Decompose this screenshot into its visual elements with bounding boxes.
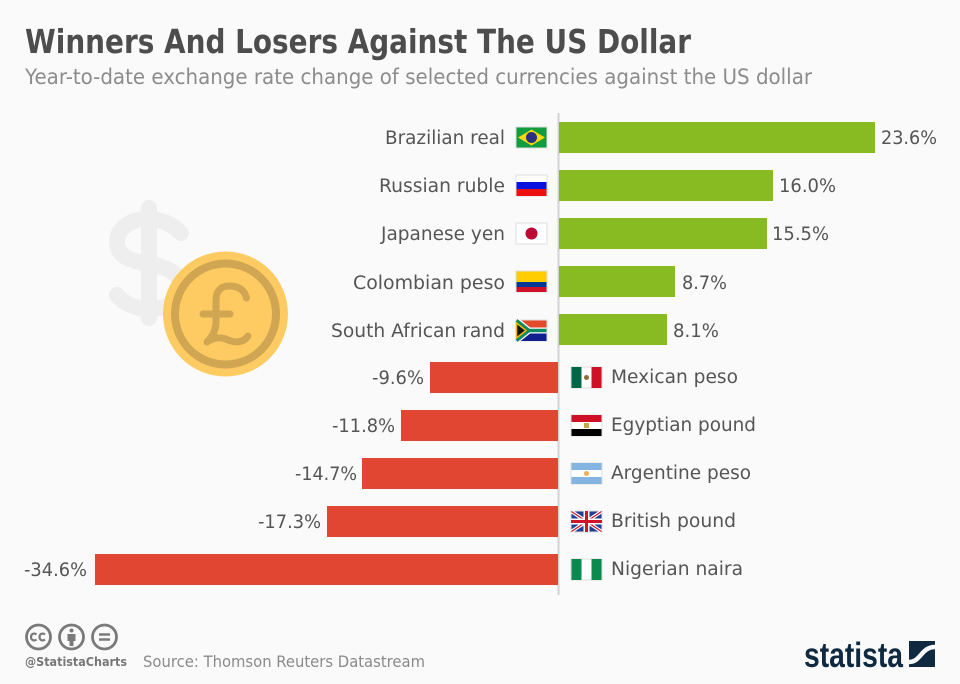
icon: pound coin bbox=[163, 252, 288, 376]
source: Source: Thomson Reuters Datastream bbox=[143, 652, 425, 671]
handle: @StatistaCharts bbox=[25, 655, 127, 669]
row: Nigerian naira: Nigerian naira bbox=[611, 559, 743, 580]
row: Russian ruble: 16.0% bbox=[779, 176, 836, 197]
icon: dollar and pound coin bbox=[117, 208, 288, 376]
row: Argentine peso: Argentine peso bbox=[611, 463, 751, 484]
row: Japanese yen: Japanese yen bbox=[380, 224, 505, 245]
row: Mexican peso: Mexican peso bbox=[611, 367, 738, 388]
row: South African rand: South African rand bbox=[331, 321, 505, 342]
row: Russian ruble bbox=[379, 170, 836, 201]
row: Colombian peso: Colombian peso bbox=[353, 273, 505, 294]
row: South African rand bbox=[331, 314, 719, 345]
icon: statista mark bbox=[909, 641, 935, 667]
row: South African rand: 8.1% bbox=[673, 321, 719, 342]
row: British pound bbox=[258, 506, 736, 537]
row: Argentine peso bbox=[295, 458, 751, 489]
row: Egyptian pound: Egyptian pound bbox=[611, 415, 756, 436]
row: Nigerian naira bbox=[24, 554, 743, 585]
row: Russian ruble: Russian ruble bbox=[379, 176, 505, 197]
row: Mexican peso bbox=[372, 362, 738, 393]
row: Brazilian real bbox=[385, 122, 937, 153]
icon: no derivatives bbox=[92, 625, 116, 649]
row: Mexican peso: -9.6% bbox=[372, 368, 424, 389]
icon: dollar sign bbox=[117, 208, 181, 318]
row: Egyptian pound bbox=[332, 410, 756, 441]
row: Brazilian real: Brazilian real bbox=[385, 128, 505, 149]
title: Winners And Losers Against The US Dollar bbox=[25, 22, 692, 61]
icon: creative commons bbox=[26, 625, 116, 649]
row: Japanese yen bbox=[380, 218, 829, 249]
row: Brazilian real: 23.6% bbox=[881, 128, 937, 149]
row: Nigerian naira: -34.6% bbox=[24, 560, 87, 581]
icon: cc bbox=[26, 625, 50, 649]
logo: statista: statista bbox=[804, 636, 903, 675]
row: Japanese yen: 15.5% bbox=[772, 224, 829, 245]
row: British pound: -17.3% bbox=[258, 512, 321, 533]
subtitle: Year-to-date exchange rate change of selected currencies against the US dollar bbox=[24, 65, 812, 89]
row: Argentine peso: -14.7% bbox=[295, 464, 357, 485]
row: Egyptian pound: -11.8% bbox=[332, 416, 395, 437]
icon: attribution bbox=[60, 625, 84, 649]
row: Colombian peso bbox=[353, 266, 727, 297]
row: Colombian peso: 8.7% bbox=[682, 273, 727, 294]
axis line bbox=[558, 113, 560, 595]
row: British pound: British pound bbox=[611, 511, 736, 532]
